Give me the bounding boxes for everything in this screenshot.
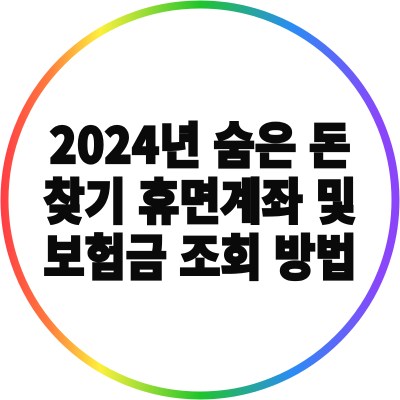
- title line 1: 2024년 숨은 돈: [50, 107, 350, 178]
- title line 3: 보험금 조회 방법: [44, 219, 356, 290]
- title: [44, 107, 356, 290]
- title line 2: 찾기 휴면계좌 및: [44, 163, 356, 234]
